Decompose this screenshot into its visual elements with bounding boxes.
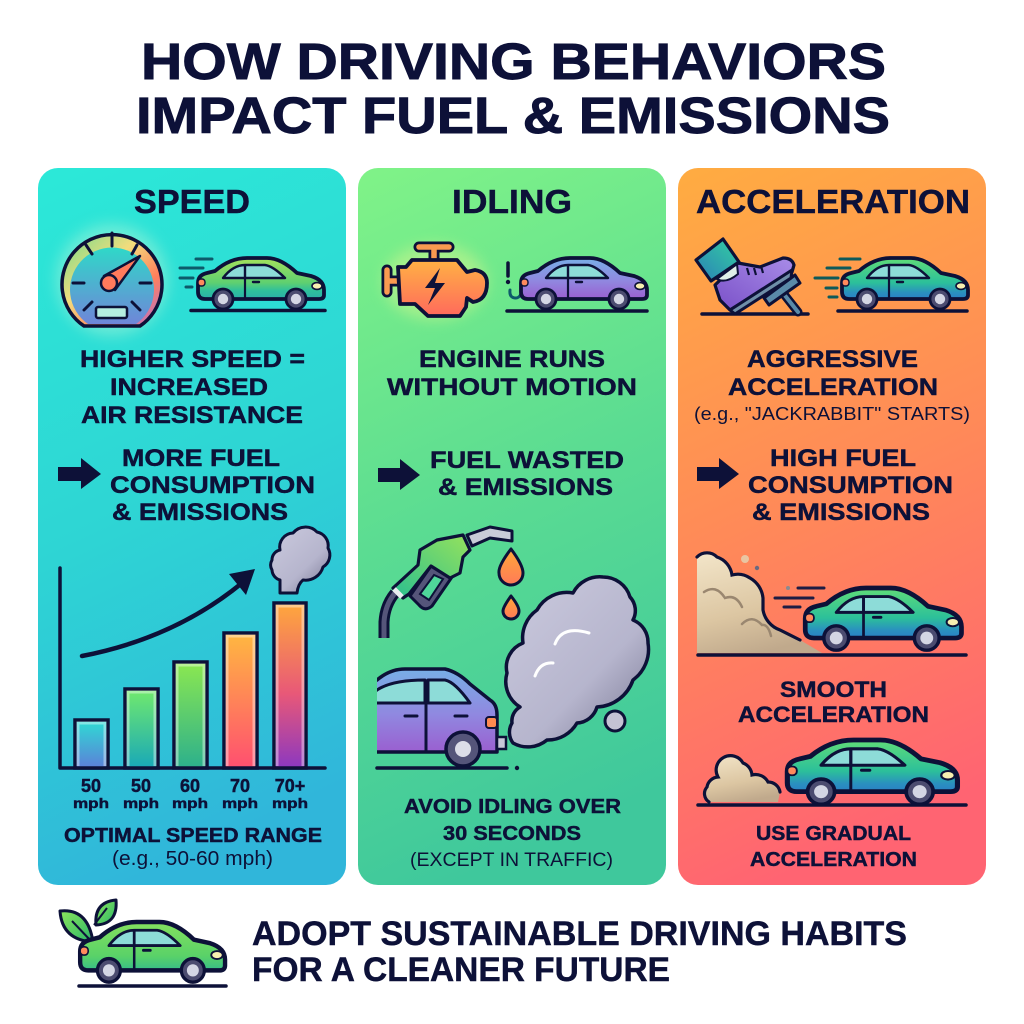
chart axis labels: mph: [172, 795, 208, 811]
arrow: acceleration result: [697, 458, 739, 489]
text: optimal speed range: OPTIMAL SPEED RANGE: [64, 825, 322, 847]
text: more fuel: [110, 445, 315, 526]
text: high fuel: [748, 445, 953, 526]
text: smooth acceleration: SMOOTH: [780, 677, 887, 702]
text: fuel wasted: FUEL WASTED: [430, 447, 624, 474]
arrow: rising trend: [82, 569, 255, 656]
icon: fuel nozzle: [384, 527, 512, 638]
chart axis labels: 50: [131, 776, 151, 796]
text: higher speed: INCREASED: [110, 374, 268, 401]
text: optimal speed range: [64, 825, 322, 870]
icon: engine: [383, 244, 487, 320]
chart axis labels: 70+: [275, 776, 305, 796]
text: aggressive acceleration: AGGRESSIVE: [747, 346, 918, 373]
text: use gradual acceleration: [750, 823, 917, 871]
text: aggressive acceleration: (e.g., "JACKRABBIT" STARTS): [694, 404, 970, 424]
chart axis labels: 50: [81, 776, 101, 796]
text: higher speed: [80, 346, 305, 429]
text: high fuel: CONSUMPTION: [748, 472, 953, 499]
heading: acceleration: ACCELERATION: [696, 183, 970, 220]
panel: idling: [358, 168, 666, 885]
text: engine runs: ENGINE RUNS: [419, 346, 605, 373]
text: use gradual acceleration: ACCELERATION: [750, 849, 917, 871]
footer message: ADOPT SUSTAINABLE DRIVING HABITS: [252, 915, 907, 953]
panel: speed: [38, 168, 346, 885]
arrow: speed result: [58, 458, 101, 489]
text: more fuel: CONSUMPTION: [110, 472, 315, 499]
icon: moving green car: [180, 258, 325, 310]
icon: idling purple car: [506, 258, 647, 311]
text: smooth acceleration: [738, 677, 929, 727]
footer message: FOR A CLEANER FUTURE: [252, 951, 670, 989]
icon: smoke cloud: [506, 577, 649, 747]
text: avoid idling: 30 SECONDS: [443, 823, 581, 845]
chart axis labels: 60: [180, 776, 200, 796]
text: engine runs: WITHOUT MOTION: [387, 374, 637, 401]
panel: acceleration: [678, 168, 986, 885]
text: fuel wasted: [430, 447, 624, 501]
chart axis labels: mph: [222, 795, 258, 811]
text: high fuel: HIGH FUEL: [770, 445, 916, 472]
icon: exhaust smoke: [271, 527, 330, 593]
text: engine runs: [387, 346, 637, 401]
icon: foot on pedal: [696, 239, 808, 314]
text: higher speed: HIGHER SPEED =: [80, 346, 305, 373]
chart axis labels: 70: [230, 776, 250, 796]
text: smooth acceleration: ACCELERATION: [738, 702, 929, 727]
icon: purple car rear with exhaust: [370, 669, 519, 770]
text: high fuel: & EMISSIONS: [752, 499, 930, 526]
text: avoid idling: (EXCEPT IN TRAFFIC): [410, 850, 613, 871]
bar chart: fuel use by speed: [60, 527, 330, 768]
title: HOW DRIVING BEHAVIORS: [141, 33, 886, 90]
icon: speedometer: [56, 224, 168, 336]
text: aggressive acceleration: ACCELERATION: [728, 374, 938, 401]
title: [136, 33, 890, 144]
chart axis labels: mph: [123, 795, 159, 811]
chart axis labels: mph: [272, 795, 308, 811]
icon: car with small dust cloud: [698, 740, 966, 805]
arrow: idling result: [378, 459, 420, 490]
icon: eco car with leaves: [60, 900, 226, 986]
heading: speed: SPEED: [134, 183, 250, 220]
text: use gradual acceleration: USE GRADUAL: [756, 823, 911, 845]
icon: fast teal car: [815, 258, 968, 311]
text: optimal speed range: (e.g., 50-60 mph): [112, 848, 273, 870]
text: higher speed: AIR RESISTANCE: [81, 402, 303, 429]
text: fuel wasted: & EMISSIONS: [438, 474, 613, 501]
icon: fuel drops: [499, 549, 523, 619]
chart axis labels: [73, 776, 308, 811]
text: avoid idling: AVOID IDLING OVER: [404, 796, 622, 818]
heading: idling: IDLING: [452, 183, 572, 220]
footer message: [252, 915, 907, 989]
text: aggressive acceleration: [694, 346, 970, 424]
chart axis labels: mph: [73, 795, 109, 811]
text: avoid idling: [404, 796, 622, 871]
icon: car with large dust cloud: [697, 553, 966, 655]
text: more fuel: & EMISSIONS: [112, 499, 288, 526]
title: IMPACT FUEL & EMISSIONS: [136, 87, 890, 144]
text: more fuel: MORE FUEL: [122, 445, 280, 472]
